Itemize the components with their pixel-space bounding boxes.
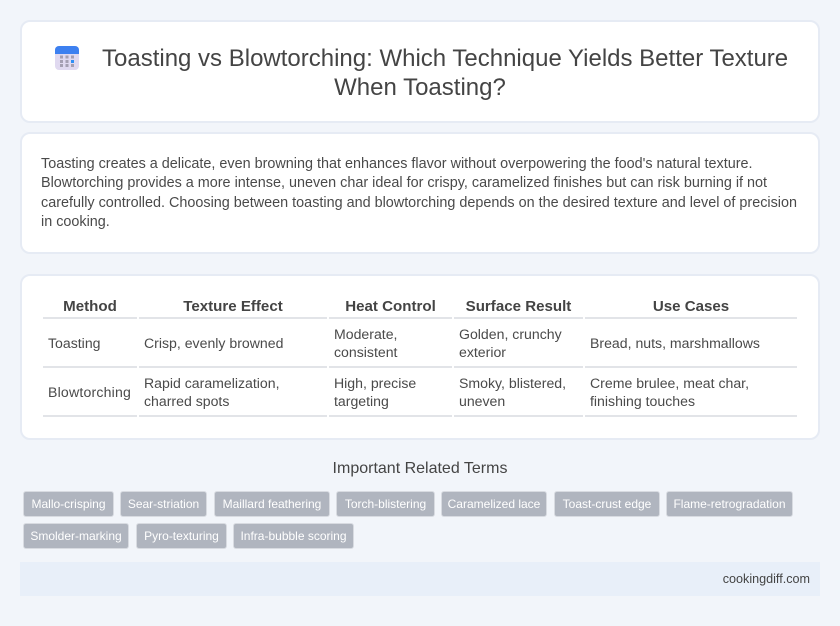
row: Blowtorching: Blowtorching [48,384,131,400]
table: High, precise [334,375,416,391]
title: When Toasting? [334,74,506,101]
summary text: Toasting creates a delicate, even browning that enhances flavor without overpowering the food's natural texture. [41,156,753,172]
table: exterior [459,344,506,360]
tag [666,491,793,517]
tag [233,523,354,549]
table [43,298,797,417]
table: Creme brulee, meat char, [590,375,749,391]
table: Crisp, evenly browned [144,335,283,351]
table: Smoky, blistered, [459,375,566,391]
tag [336,491,435,517]
tag [120,491,207,517]
table: Bread, nuts, marshmallows [590,335,760,351]
tag: Sear-striation [128,497,199,511]
row: Toasting: Toasting [48,335,100,351]
footer [20,562,820,596]
tag: Infra-bubble scoring [240,529,347,543]
table: Golden, crunchy [459,326,562,342]
tags: related terms [23,491,793,549]
header: Texture Effect: Texture Effect [183,298,283,315]
panel: header [20,20,820,123]
table: Moderate, [334,326,397,342]
panel: comparison table [20,274,820,440]
panel: summary [20,132,820,254]
tag: Mallo-crisping [31,497,106,511]
table: finishing touches [590,393,695,409]
header: Method: Method [63,298,117,315]
tag [214,491,330,517]
summary text: Blowtorching provides a more intense, uneven char ideal for crispy, caramelized finishes but can risk burning if not [41,175,767,191]
table: consistent [334,344,397,360]
tag: Smolder-marking [30,529,122,543]
summary text: in cooking. [41,214,110,230]
tag [136,523,227,549]
tag [554,491,660,517]
table: targeting [334,393,389,409]
icon: calendar [55,46,79,70]
footer: source: cookingdiff.com [723,572,810,586]
tag [441,491,547,517]
tag: Toast-crust edge [563,497,651,511]
header: Use Cases: Use Cases [653,298,729,315]
header: Heat Control: Heat Control [345,298,436,315]
heading: related terms: Important Related Terms [333,460,507,477]
tag: Pyro-texturing [144,529,219,543]
table: uneven [459,393,505,409]
header: Surface Result: Surface Result [466,298,571,315]
tag: Caramelized lace [448,497,540,511]
summary text: carefully controlled. Choosing between toasting and blowtorching depends on the desired texture and level of precision [41,195,797,211]
tag: Torch-blistering [345,497,426,511]
tag: Flame-retrogradation [673,497,786,511]
tag [23,523,129,549]
tag: Maillard feathering [223,497,321,511]
table: Rapid caramelization, [144,375,280,391]
title [102,45,788,101]
title: Toasting vs Blowtorching: Which Technique Yields Better Texture [102,45,788,72]
table: charred spots [144,393,229,409]
summary text [41,156,797,230]
tag [23,491,114,517]
